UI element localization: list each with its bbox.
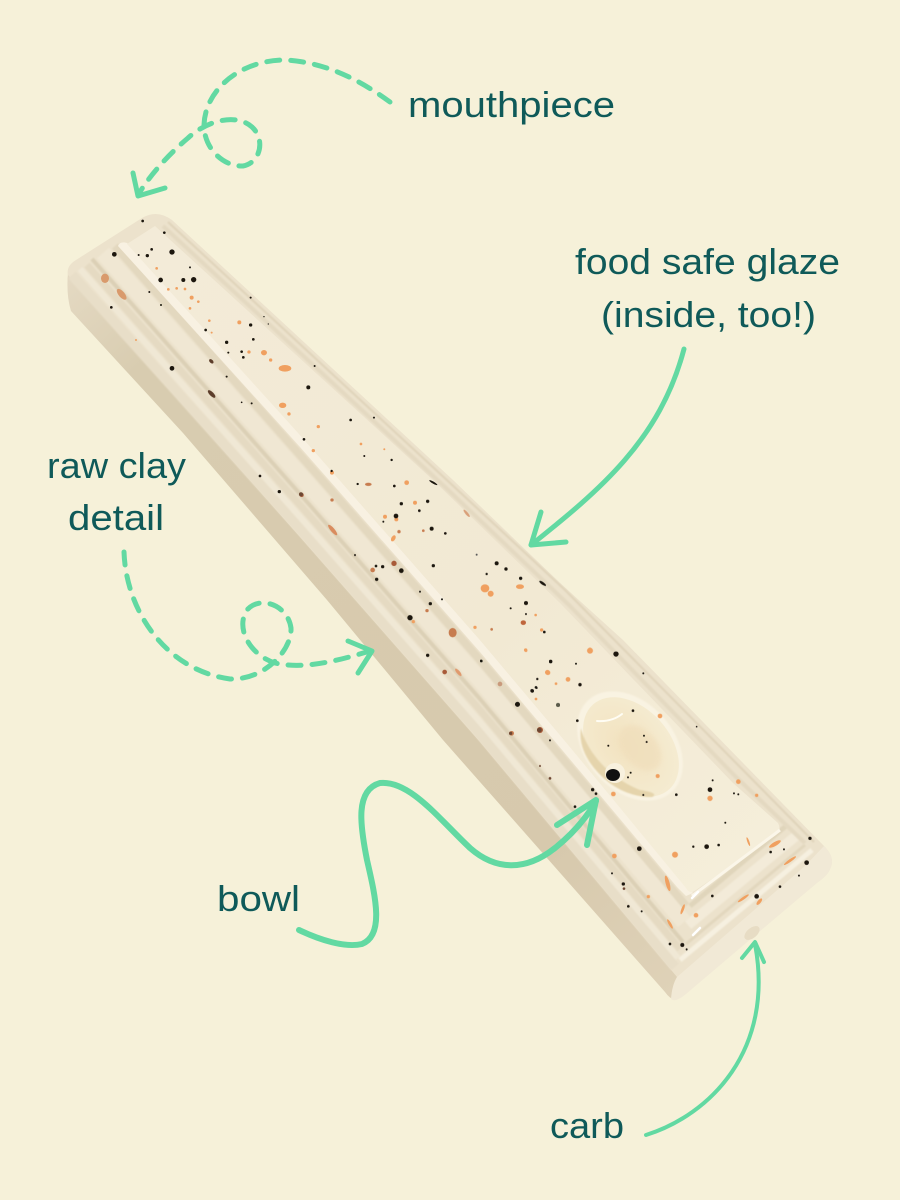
label: detail: detail <box>68 497 164 538</box>
bowl recess <box>556 670 704 822</box>
orange glaze speckles <box>101 267 797 929</box>
label: carb: carb <box>550 1105 624 1146</box>
middle ridge <box>103 253 684 922</box>
moulding at the end <box>680 826 812 960</box>
lip highlight <box>80 269 678 958</box>
lip band <box>72 275 675 967</box>
carb hole <box>742 923 762 943</box>
channel dark line <box>92 259 683 942</box>
moulded ridges, left side <box>72 246 686 967</box>
panel edge highlight <box>692 830 780 896</box>
label: mouthpiece: mouthpiece <box>408 84 615 125</box>
pipe photo illustration <box>67 214 832 1000</box>
arrow: raw clay dashed loop <box>124 552 372 679</box>
label: inside too: (inside, too!) <box>601 294 816 335</box>
label: bowl: bowl <box>217 878 300 919</box>
arrow: mouthpiece dashed loop <box>133 60 390 196</box>
glazed body top <box>68 214 832 997</box>
inner raised panel <box>127 226 780 892</box>
arrow: food safe glaze <box>531 349 684 545</box>
arrow: carb <box>646 942 764 1135</box>
label: raw clay: raw clay <box>47 445 186 486</box>
corner glints <box>692 892 700 935</box>
moulding lines on top-right edge <box>163 222 814 843</box>
raw clay side face <box>67 272 690 999</box>
ridge shade <box>115 246 686 906</box>
bowl hole <box>605 763 625 783</box>
black speckles <box>110 220 812 950</box>
bright edge on panel <box>118 242 693 896</box>
lower channel <box>87 265 680 949</box>
front end face <box>671 846 832 1000</box>
arrow: bowl squiggle <box>299 783 596 945</box>
label: food safe glaze: food safe glaze <box>575 241 840 282</box>
